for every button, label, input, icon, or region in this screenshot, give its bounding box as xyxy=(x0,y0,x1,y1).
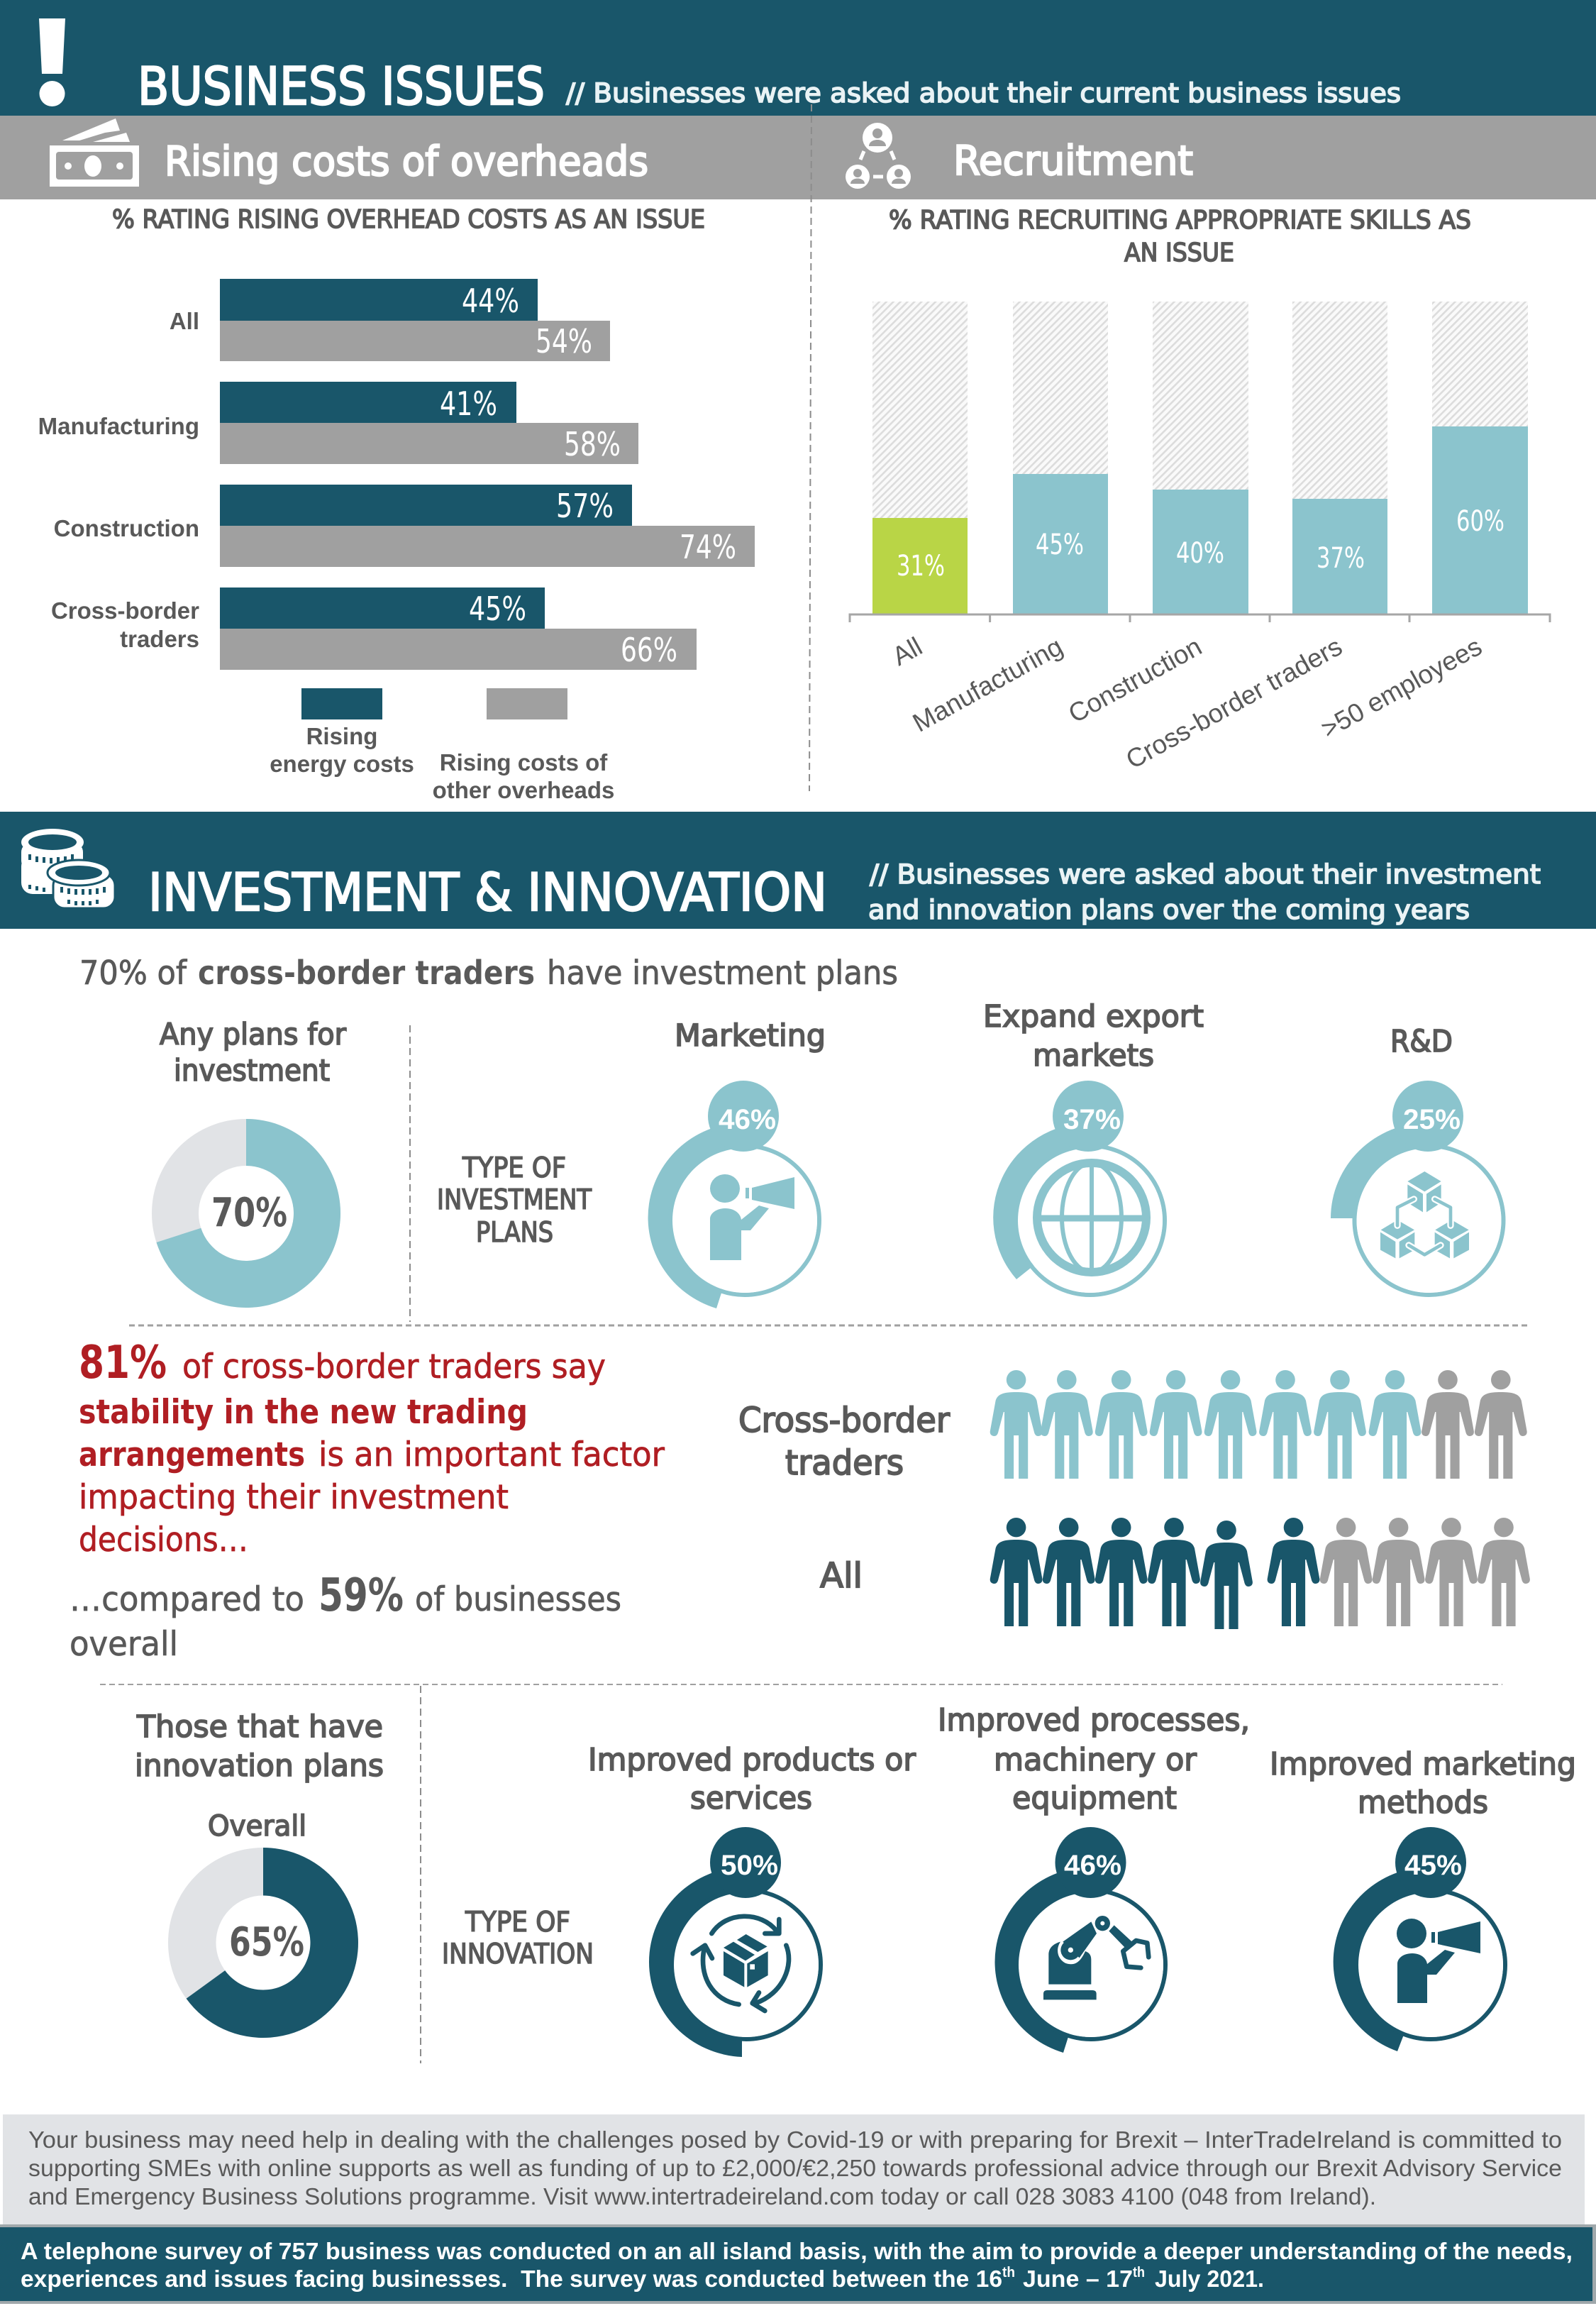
bar chart: recruiting skills: >50 employees xyxy=(1317,631,1487,744)
bar chart: overhead costs by sector: 66% xyxy=(621,631,677,669)
panel: improved products or services 50%: Improved products or xyxy=(588,1742,916,1778)
icon: banknotes xyxy=(50,118,139,187)
bar chart: overhead costs by sector xyxy=(38,279,755,670)
bar chart: recruiting skills: All xyxy=(887,631,927,671)
text: 81% stability statement: stability in the new trading xyxy=(79,1393,528,1432)
legend: other overheads: other overheads xyxy=(433,777,614,803)
chart: innovation donut 65% xyxy=(187,1848,358,2038)
panel: survey note footer: th xyxy=(1002,2265,1015,2280)
text: type of innovation: INNOVATION xyxy=(442,1938,594,1970)
panel: recruitment chart xyxy=(850,206,1550,774)
text: type of innovation xyxy=(442,1907,594,1970)
panel: marketing investment 46%: 46% xyxy=(719,1104,776,1135)
panel: expand export markets 37%: 37% xyxy=(1063,1104,1121,1135)
bar chart: recruiting skills: 31% xyxy=(897,550,945,583)
panel: improved processes 46%: equipment xyxy=(1012,1780,1177,1816)
bar chart: recruiting skills: 45% xyxy=(1036,529,1084,561)
legend: energy costs xyxy=(270,688,414,777)
panel: expand export markets 37% xyxy=(983,999,1204,1295)
panel: expand export markets 37%: Expand export xyxy=(983,999,1204,1035)
panel: research and development 25% xyxy=(1331,1024,1504,1295)
heading: any plans for investment: Any plans for xyxy=(160,1017,347,1052)
text: 59% comparison xyxy=(70,1569,621,1664)
heading: recruitment: Recruitment xyxy=(953,138,1193,184)
panel: support message footer: supporting SMEs with online supports as well as funding of up to £2,000/€2,250 towards professional advice through our Brexit Advisory Service xyxy=(28,2155,1562,2181)
text: all row label: All xyxy=(820,1556,863,1596)
text: investment subtitle: and innovation plans over the coming years xyxy=(868,895,1470,925)
icon: exclamation mark xyxy=(39,18,65,106)
pictogram: all businesses 6 of 10 xyxy=(990,1518,1530,1629)
heading: investment and innovation: INVESTMENT & INNOVATION xyxy=(148,863,827,923)
bar chart: overhead costs by sector: All xyxy=(170,308,199,334)
text: 81% stability statement: 81% xyxy=(79,1337,167,1389)
bar chart: recruiting skills: 37% xyxy=(1317,542,1365,575)
icon: person with megaphone xyxy=(1397,1919,1480,2003)
panel: improved processes 46%: machinery or xyxy=(994,1742,1197,1778)
panel: improved products or services 50% xyxy=(588,1742,916,2057)
panel: survey note footer: th xyxy=(1133,2265,1145,2280)
panel: improved marketing methods 45%: methods xyxy=(1358,1784,1488,1821)
bar chart: overhead costs by sector: 57% xyxy=(556,487,614,525)
text: 81% stability statement: is an important factor xyxy=(318,1435,665,1474)
text: cross-border traders row label: Cross-border xyxy=(738,1401,950,1440)
text: 59% comparison: of businesses xyxy=(415,1580,621,1619)
heading: rising costs of overheads: Rising costs of overheads xyxy=(165,138,648,185)
bar chart: overhead costs by sector: 45% xyxy=(469,590,526,628)
panel: improved products or services 50%: services xyxy=(690,1780,812,1816)
panel: investment and innovation header xyxy=(0,812,1596,929)
text: investment subtitle xyxy=(868,859,1541,925)
bar chart: overhead costs by sector: traders xyxy=(120,626,199,652)
panel: improved processes 46%: Improved processes, xyxy=(938,1702,1250,1738)
panel: improved processes 46% xyxy=(938,1702,1250,2053)
heading: those that have innovation plans: innovation plans xyxy=(135,1748,384,1784)
legend: energy costs: energy costs xyxy=(270,751,414,777)
bar chart: overhead costs by sector: 74% xyxy=(680,528,736,566)
panel: rising overhead costs chart xyxy=(38,205,755,803)
panel: improved products or services 50%: 50% xyxy=(721,1850,778,1881)
text: cross-border traders row label: traders xyxy=(785,1443,904,1483)
text: business issues subtitle: // Businesses were asked about their current business issues xyxy=(566,78,1401,109)
heading: business issues: BUSINESS ISSUES xyxy=(138,57,545,117)
panel: improved marketing methods 45%: 45% xyxy=(1404,1850,1462,1881)
panel: support message footer: and Emergency Business Solutions programme. Visit www.intertradeireland.com today or call 028 3083 4100 (048 from Ireland). xyxy=(28,2183,1376,2210)
text: cross-border traders row label xyxy=(738,1401,950,1483)
text: 81% stability statement: decisions… xyxy=(79,1521,248,1560)
heading: recruitment chart title: % RATING RECRUITING APPROPRIATE SKILLS AS xyxy=(889,206,1471,235)
text: cross-border investment statement: have investment plans xyxy=(547,954,898,992)
heading: recruitment chart title xyxy=(889,206,1471,267)
text: 81% stability statement: impacting their investment xyxy=(79,1478,509,1517)
legend: other overheads: Rising costs of xyxy=(440,749,608,776)
chart: investment donut 70%: 70% xyxy=(211,1190,287,1236)
heading: those that have innovation plans xyxy=(135,1709,384,1784)
text: type of investment plans xyxy=(437,1152,592,1249)
bar chart: overhead costs by sector: 44% xyxy=(462,282,519,320)
bar chart: overhead costs by sector: 54% xyxy=(536,322,592,360)
bar chart: recruiting skills: Manufacturing xyxy=(908,631,1068,738)
panel: survey note footer: July 2021. xyxy=(1155,2266,1264,2292)
panel: survey note footer: experiences and issues facing businesses. The survey was conducted between the 16 xyxy=(21,2266,1002,2292)
panel: grey subheader band xyxy=(0,116,1596,199)
text: type of investment plans: INVESTMENT xyxy=(437,1184,592,1216)
icon: person with megaphone xyxy=(710,1174,794,1260)
text: 81% stability statement xyxy=(79,1337,665,1560)
heading: any plans for investment: investment xyxy=(174,1053,330,1088)
text: 59% comparison: 59% xyxy=(318,1569,404,1622)
panel: improved marketing methods 45%: Improved marketing xyxy=(1270,1746,1576,1782)
text: type of investment plans: PLANS xyxy=(476,1217,553,1249)
text: 81% stability statement: of cross-border traders say xyxy=(182,1347,606,1386)
icon: connected cubes xyxy=(1380,1171,1469,1258)
text: type of investment plans: TYPE OF xyxy=(462,1152,566,1184)
heading: overhead chart title: % RATING RISING OVERHEAD COSTS AS AN ISSUE xyxy=(112,205,705,234)
chart: investment donut 70% xyxy=(156,1119,340,1308)
legend: other overheads xyxy=(433,688,614,803)
panel: expand export markets 37%: markets xyxy=(1033,1038,1154,1074)
bar chart: overhead costs by sector: 58% xyxy=(564,425,621,463)
panel: improved processes 46%: 46% xyxy=(1064,1850,1121,1881)
panel: support message footer: Your business may need help in dealing with the challenges posed by Covid-19 or with preparing for Brexit – InterTradeIreland is committed to xyxy=(28,2126,1562,2153)
bar chart: recruiting skills: Cross-border traders xyxy=(1121,631,1347,774)
bar chart: overhead costs by sector: 41% xyxy=(440,385,497,423)
text: cross-border investment statement: 70% of xyxy=(79,954,188,992)
icon: coin stacks xyxy=(21,829,115,908)
panel: research and development 25%: 25% xyxy=(1403,1104,1461,1135)
text: cross-border investment statement: cross-border traders xyxy=(198,954,535,992)
bar chart: recruiting skills: 40% xyxy=(1176,537,1224,570)
panel: survey note footer: A telephone survey of 757 business was conducted on an all island basis, with the aim to provide a deeper understanding of the needs, xyxy=(21,2238,1573,2264)
heading: those that have innovation plans: Those that have xyxy=(136,1709,383,1745)
heading: recruitment chart title: AN ISSUE xyxy=(1124,238,1234,267)
heading: any plans for investment xyxy=(160,1017,347,1088)
bar chart: recruiting skills: Construction xyxy=(1063,631,1207,729)
bar chart: overhead costs by sector: Manufacturing xyxy=(38,413,199,439)
chart: innovation donut 65%: 65% xyxy=(229,1919,304,1965)
panel: survey note footer xyxy=(0,2224,1596,2304)
text: 59% comparison: overall xyxy=(70,1625,178,1664)
text: investment subtitle: // Businesses were asked about their investment xyxy=(870,859,1541,890)
panel: marketing investment 46%: Marketing xyxy=(675,1018,826,1054)
bar chart: recruiting skills: 60% xyxy=(1456,505,1504,538)
icon: robot arm xyxy=(1043,1916,1148,1999)
panel: research and development 25%: R&D xyxy=(1390,1024,1453,1059)
bar chart: recruiting skills xyxy=(850,302,1550,774)
text: type of innovation: TYPE OF xyxy=(465,1907,570,1938)
text: 59% comparison: …compared to xyxy=(70,1580,304,1619)
icon: recruitment network xyxy=(846,123,911,189)
icon: globe xyxy=(1037,1163,1146,1272)
bar chart: overhead costs by sector: Construction xyxy=(54,515,199,541)
text: cross-border investment statement xyxy=(79,954,898,992)
panel: business issues header xyxy=(0,0,1596,117)
panel: improved marketing methods 45% xyxy=(1270,1746,1576,2051)
pictogram: cross-border traders 8 of 10 xyxy=(990,1370,1527,1479)
bar chart: overhead costs by sector: Cross-border xyxy=(51,597,199,624)
legend: energy costs: Rising xyxy=(306,723,377,749)
panel: marketing investment 46% xyxy=(648,1018,826,1308)
panel: survey note footer: June – 17 xyxy=(1023,2266,1133,2292)
text: 81% stability statement: arrangements xyxy=(79,1435,305,1474)
icon: box with cycle arrows xyxy=(693,1916,789,2011)
panel: support message footer xyxy=(3,2114,1585,2224)
text: overall label: Overall xyxy=(208,1810,306,1843)
